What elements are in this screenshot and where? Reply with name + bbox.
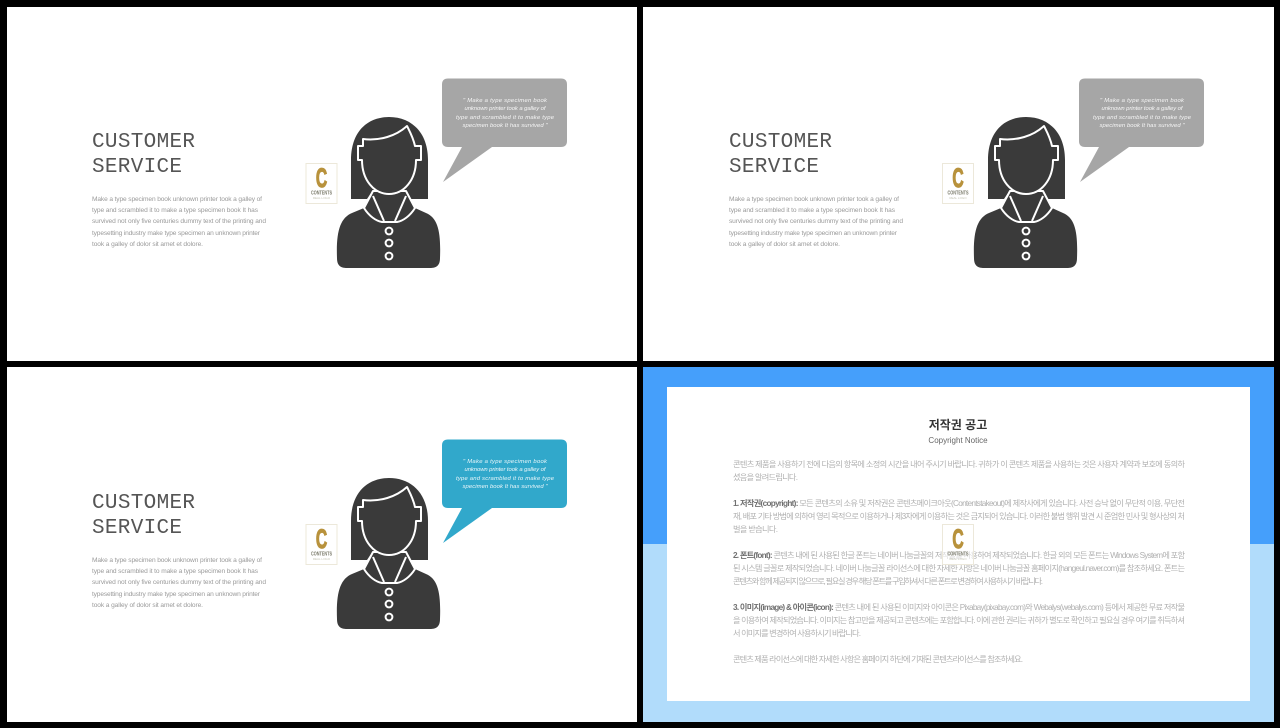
callout: speech bubble — [442, 440, 567, 543]
text block: typesetting industry make type specimen an unknown printer — [92, 591, 261, 598]
title: copyright notice: 저작권 공고 — [929, 417, 987, 432]
callout: speech bubble: unknown printer took a galley of — [1102, 106, 1184, 112]
text block: font: 된 시스템 글꼴로 제작되었습니다. 네이버 나눔글꼴 라이선스에 대한 자세한 사항은 네이버 나눔글꼴 홈페이지(hangeul.naver.com)를 참조하세요. 폰트는 — [733, 563, 1185, 573]
text block: Make a type specimen book unknown printer took a galley of — [729, 196, 899, 203]
text block: type and scrambled it to make a type specimen book It has — [92, 207, 259, 214]
text block: font: 콘텐츠와 함께 제공되지 않으므로, 필요실 경우 해당 폰트를 구입하셔서 다른 폰트로 변경하여 사용하시기 바랍니다. — [733, 576, 1043, 586]
icon: contents logo: REAL LOGO — [313, 557, 331, 561]
icon: contents logo: CONTENTS — [311, 552, 333, 558]
text block: type and scrambled it to make a type specimen book It has — [92, 568, 259, 575]
heading: CUSTOMER — [92, 492, 195, 515]
text block: intro: 셨음을 알려드립니다. — [733, 472, 798, 482]
icon: contents logo: REAL LOGO — [313, 196, 331, 200]
icon: contents logo — [306, 524, 337, 564]
icon: woman avatar — [974, 117, 1077, 268]
icon: contents logo: C — [952, 163, 964, 193]
heading: SERVICE — [92, 517, 182, 540]
text block: intro: 콘텐츠 제품을 사용하기 전에 다음의 항목에 소정의 시간을 내어 주시기 바랍니다. 귀하가 이 콘텐츠 제품을 사용하는 것은 사용자 계약과 보호에 동의하 — [733, 459, 1185, 469]
heading — [729, 131, 832, 179]
callout: speech bubble: unknown printer took a galley of — [464, 467, 547, 473]
heading — [92, 492, 195, 540]
title: copyright notice — [928, 417, 988, 445]
text block: image and icon — [733, 602, 1185, 638]
icon: contents logo: CONTENTS — [948, 190, 969, 196]
panel: slide 2 customer service — [643, 7, 1274, 361]
icon: contents logo: REAL LOGO — [949, 557, 967, 561]
text block: font — [733, 550, 1185, 586]
icon: contents logo: C — [316, 524, 327, 554]
callout: speech bubble: specimen book It has survived " — [462, 123, 548, 129]
callout: speech bubble — [442, 78, 567, 182]
heading: SERVICE — [92, 156, 182, 179]
icon: contents logo: REAL LOGO — [949, 196, 967, 200]
icon: woman avatar — [337, 478, 440, 629]
icon: woman avatar — [337, 117, 440, 268]
text block: copyright: 벌을 받습니다. — [733, 524, 778, 534]
icon: contents logo: CONTENTS — [311, 190, 333, 196]
text block: type and scrambled it to make a type specimen book It has — [729, 207, 896, 214]
icon: contents logo — [942, 524, 974, 564]
callout: speech bubble: unknown printer took a galley of — [464, 106, 547, 112]
text block: typesetting industry make type specimen an unknown printer — [92, 230, 261, 237]
callout: speech bubble: specimen book It has survived " — [1100, 123, 1185, 129]
text block: copyright — [733, 498, 1185, 534]
text block: Make a type specimen book unknown printer took a galley of — [92, 196, 262, 203]
callout: speech bubble: type and scrambled it to make type — [456, 115, 555, 121]
text block: took a galley of dolor sit amet et dolore. — [92, 602, 203, 609]
text block: survived not only five centuries dummy text of the printing and — [729, 218, 903, 225]
callout: speech bubble: " Make a type specimen book — [1100, 98, 1185, 104]
callout: speech bubble: specimen book It has survived " — [462, 484, 548, 490]
text block: license note: 콘텐츠 제품 라이선스에 대한 자세한 사항은 홈페이지 하단에 기재된 콘텐츠라이선스를 참조하세요. — [733, 654, 1023, 664]
heading — [92, 131, 195, 179]
text block: copyright: 재, 배포 기타 방법에 의하여 영리 목적으로 이용하거나 제3자에게 이용하는 것은 금지되어 있습니다. 이러한 불법 행위 발견 시 준엄한 민사 및 형사상의 처 — [733, 511, 1185, 521]
text block: copyright: 1. 저작권(copyright): 모든 콘텐츠의 소유 및 저작권은 콘텐츠메이크아웃(Contentstakeout)에 제작사에게 있습니다. 사전 승낙 없이 무단적 이용, 무단전 — [733, 498, 1185, 508]
panel: slide 1 customer service — [7, 7, 637, 361]
text block: font: 2. 폰트(font): 콘텐츠 내에 된 사용된 한글 폰트는 네이버 나눔글꼴의 저작물을 사용하여 제작되었습니다. 한글 외의 모든 폰트는 Windows System에 포함 — [733, 550, 1185, 560]
text block — [92, 196, 266, 248]
callout: speech bubble: type and scrambled it to make type — [1093, 115, 1192, 121]
text block — [729, 196, 903, 248]
text block: typesetting industry make type specimen an unknown printer — [729, 230, 898, 237]
heading: CUSTOMER — [92, 131, 195, 154]
icon: contents logo: CONTENTS — [948, 552, 969, 558]
text block: took a galley of dolor sit amet et dolore. — [92, 241, 203, 248]
text block: image and icon: 3. 이미지(image) & 아이콘(icon): 콘텐츠 내에 된 사용된 이미지와 아이콘은 Pixabay(pixabay.com)와 Webalys(webalys.com) 등에서 제공한 무료 저작물 — [733, 602, 1185, 612]
heading: CUSTOMER — [729, 131, 832, 154]
text block: Make a type specimen book unknown printer took a galley of — [92, 557, 262, 564]
panel: slide 4 copyright notice — [643, 367, 1274, 722]
callout: speech bubble: type and scrambled it to make type — [456, 476, 555, 482]
text block: image and icon: 서 이미지를 변경하여 사용하시기 바랍니다. — [733, 628, 861, 638]
icon: contents logo: C — [952, 524, 964, 554]
text block — [92, 557, 266, 609]
panel: slide 3 customer service blue — [7, 367, 637, 722]
title: copyright notice: Copyright Notice — [928, 436, 988, 445]
text block: survived not only five centuries dummy text of the printing and — [92, 218, 266, 225]
callout: speech bubble: " Make a type specimen book — [463, 459, 548, 465]
text block: image and icon: 을 이용하여 제작되었습니다. 이미지는 참고만을 제공되고 콘텐츠에는 포함합니다. 이에 관한 권리는 귀하가 별도로 확인하고 필요실 경우 여기를 취득하셔 — [733, 615, 1185, 625]
icon: contents logo — [942, 163, 974, 204]
icon: contents logo — [306, 163, 337, 204]
text block: survived not only five centuries dummy text of the printing and — [92, 579, 266, 586]
callout: speech bubble: " Make a type specimen book — [463, 98, 548, 104]
heading: SERVICE — [729, 156, 819, 179]
icon: contents logo: C — [316, 163, 327, 193]
text block: took a galley of dolor sit amet et dolore. — [729, 241, 840, 248]
callout: speech bubble — [1079, 78, 1204, 182]
text block: intro — [733, 459, 1185, 482]
